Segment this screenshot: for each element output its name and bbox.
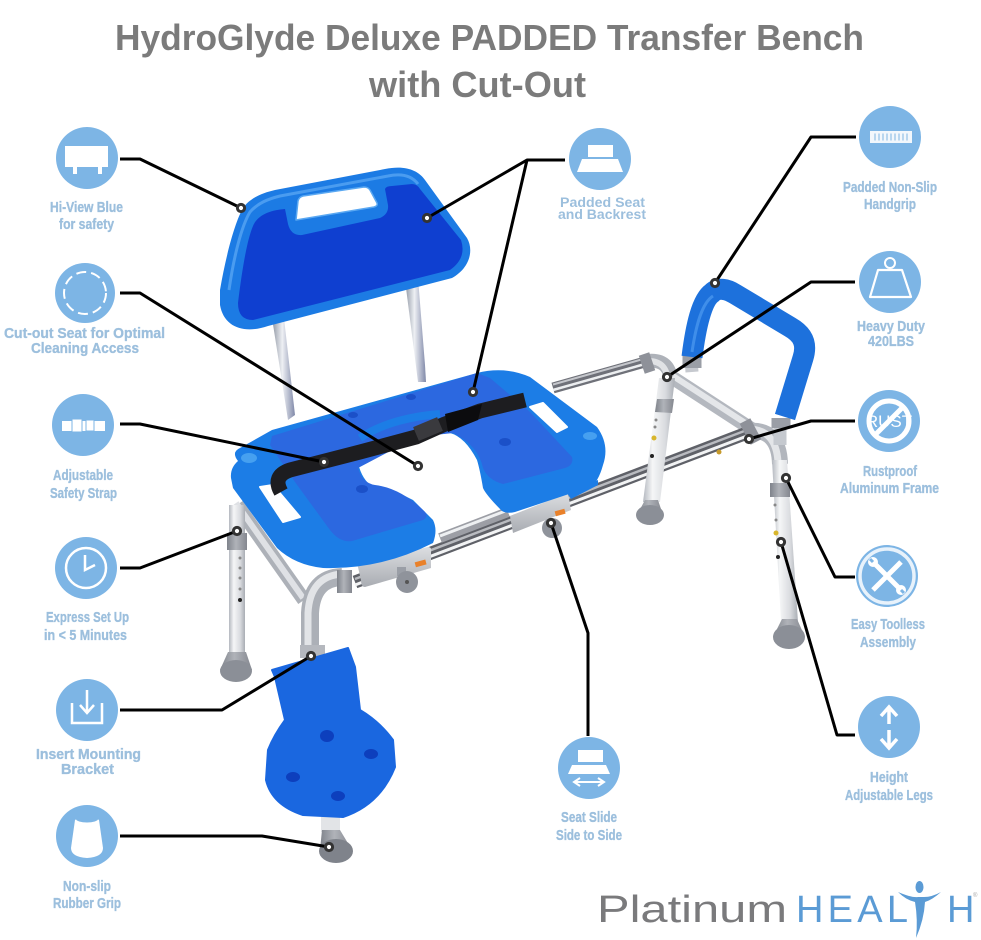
label: rubber grip: Non-slip xyxy=(63,879,111,895)
icon: weight xyxy=(859,251,921,313)
label: safety strap: Safety Strap xyxy=(50,486,117,502)
label: handgrip: Handgrip xyxy=(864,197,916,213)
logo: platinum health: ® xyxy=(973,892,978,899)
icon: padded seat xyxy=(569,128,631,190)
icon: toolless assembly xyxy=(856,545,918,607)
title: HydroGlyde Deluxe PADDED Transfer Bench xyxy=(115,17,864,58)
icon: clock xyxy=(55,537,117,599)
label: heavy duty: 420LBS xyxy=(868,334,914,350)
icon: rustproof xyxy=(858,390,920,452)
label: safety strap xyxy=(50,468,117,502)
handgrip armrest xyxy=(692,289,805,428)
safety strap xyxy=(278,400,525,492)
label: handgrip xyxy=(843,180,937,213)
label: height legs: Height xyxy=(870,770,908,786)
title xyxy=(115,17,864,105)
label: heavy duty xyxy=(857,319,925,350)
aluminum frame xyxy=(236,345,780,647)
icon: mounting bracket xyxy=(56,679,118,741)
icon: hi-view blue xyxy=(56,127,118,189)
backrest pad xyxy=(238,184,463,320)
seat clamps and knobs xyxy=(357,480,598,593)
label: cut-out seat xyxy=(4,326,165,357)
seat cushion xyxy=(270,373,572,541)
label: mounting bracket: Insert Mounting xyxy=(36,747,141,763)
label: cut-out seat: Cleaning Access xyxy=(31,341,139,357)
icon: height arrows xyxy=(858,696,920,758)
label: rustproof xyxy=(840,464,939,497)
frame legs xyxy=(227,378,798,660)
icon: handgrip xyxy=(859,106,921,168)
leader lines xyxy=(120,137,856,847)
label: rubber grip xyxy=(53,879,121,912)
icon: rubber grip xyxy=(56,805,118,867)
label: cut-out seat: Cut-out Seat for Optimal xyxy=(4,326,165,342)
seat cushion holes xyxy=(348,394,511,493)
icon: seat slide xyxy=(558,737,620,799)
icon: rustproof: RUST xyxy=(866,412,912,431)
label: rubber grip: Rubber Grip xyxy=(53,896,121,912)
label: height legs xyxy=(845,770,933,804)
leg feet xyxy=(220,500,805,863)
backrest highlight xyxy=(229,175,418,290)
label: hi-view blue: for safety xyxy=(59,217,114,233)
label: rustproof: Rustproof xyxy=(863,464,917,480)
title: with Cut-Out xyxy=(368,64,586,105)
icon: safety strap xyxy=(52,394,114,456)
label: safety strap: Adjustable xyxy=(53,468,113,484)
logo: platinum health: HEAL xyxy=(796,889,908,931)
label: hi-view blue xyxy=(50,200,123,233)
callout dots xyxy=(233,204,790,851)
label: seat slide: Seat Slide xyxy=(561,810,617,826)
icon: cut-out seat xyxy=(55,263,115,323)
label: toolless assembly xyxy=(851,617,925,651)
label: toolless assembly: Assembly xyxy=(860,635,916,651)
leg adjustment holes xyxy=(238,418,780,602)
label: padded seat: and Backrest xyxy=(558,207,647,222)
label: mounting bracket: Bracket xyxy=(61,762,114,778)
label: rustproof: Aluminum Frame xyxy=(840,481,939,497)
label: express set up xyxy=(44,610,129,644)
label: padded seat xyxy=(558,195,647,222)
label: toolless assembly: Easy Toolless xyxy=(851,617,925,633)
seat handle holes xyxy=(241,403,597,522)
label: heavy duty: Heavy Duty xyxy=(857,319,925,335)
backrest posts xyxy=(272,278,426,420)
label: seat slide: Side to Side xyxy=(556,828,622,844)
logo: platinum health xyxy=(597,881,978,938)
bench illustration xyxy=(220,168,805,863)
label: express set up: in < 5 Minutes xyxy=(44,628,127,644)
label: padded seat: Padded Seat xyxy=(560,195,646,210)
backrest xyxy=(220,168,470,329)
logo figure xyxy=(898,881,941,938)
label: seat slide xyxy=(556,810,622,844)
label: height legs: Adjustable Legs xyxy=(845,788,933,804)
backrest handle hole xyxy=(296,187,377,220)
logo: platinum health: H xyxy=(947,889,974,931)
transfer bracket blue insert xyxy=(266,648,395,817)
label: express set up: Express Set Up xyxy=(46,610,129,626)
label: mounting bracket xyxy=(36,747,141,778)
padded seat base with cut-out xyxy=(231,370,605,568)
label: handgrip: Padded Non-Slip xyxy=(843,180,937,196)
seat cut-out ring xyxy=(360,414,440,438)
logo: platinum health: Platinum xyxy=(597,889,787,931)
label: hi-view blue: Hi-View Blue xyxy=(50,200,123,216)
